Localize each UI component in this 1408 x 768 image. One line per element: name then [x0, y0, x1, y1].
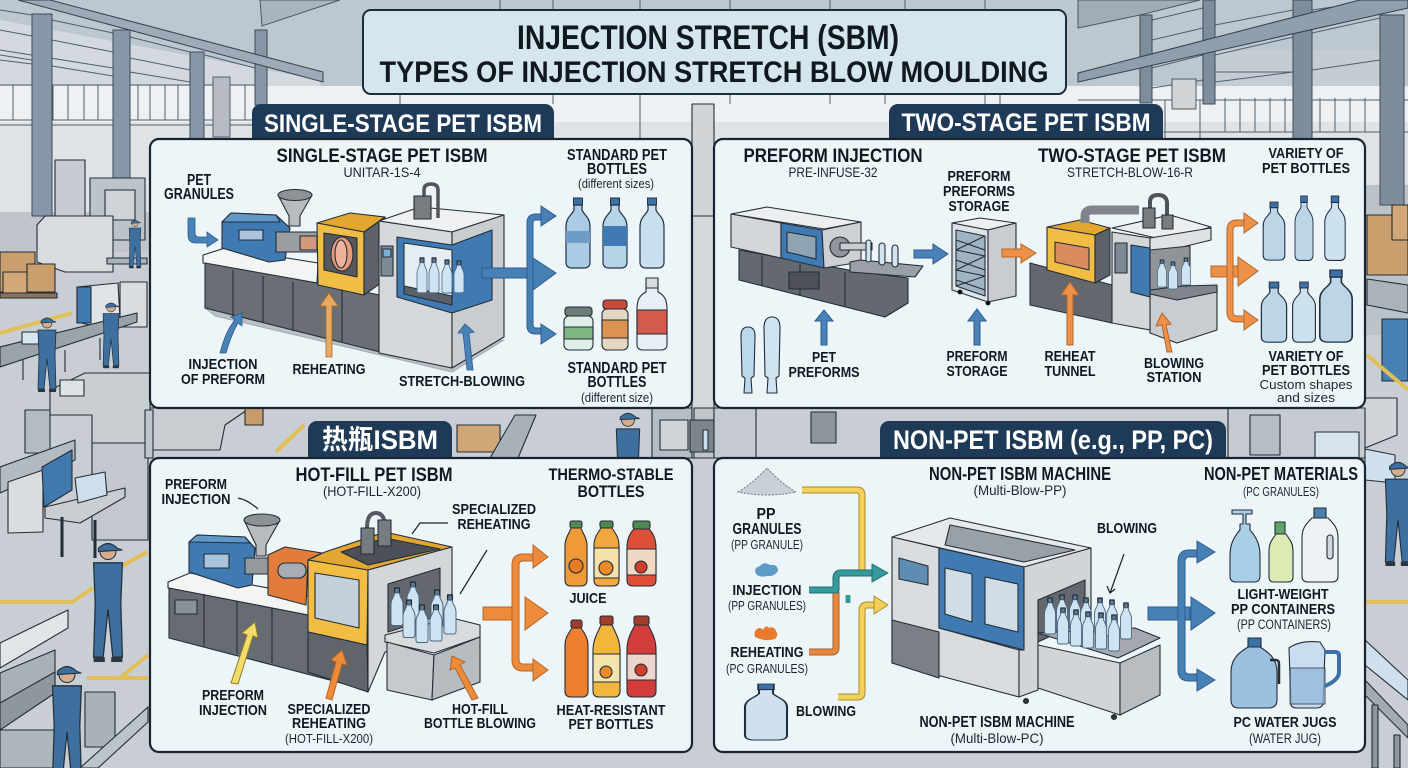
- labels: non-PET: PC WATER JUGS: [1234, 714, 1336, 731]
- callout arrows: hot-fill: [231, 498, 487, 700]
- labels: two-stage: TUNNEL: [1044, 363, 1096, 380]
- labels: single-stage: OF PREFORM: [181, 371, 265, 388]
- main title: [363, 10, 1066, 94]
- labels: non-PET: (PP GRANULE): [731, 537, 803, 552]
- labels: two-stage: STRETCH-BLOW-16-R: [1067, 164, 1193, 180]
- labels: single-stage: [164, 145, 667, 405]
- flow lines: materials: [802, 490, 888, 697]
- panel: two-stage PET ISBM: [714, 104, 1365, 408]
- labels: single-stage: PET: [187, 172, 211, 189]
- labels: two-stage: Custom shapes: [1260, 377, 1353, 392]
- tab heading: non-PET: NON-PET ISBM (e.g., PP, PC): [893, 425, 1213, 455]
- tab heading: hot-fill: [308, 421, 452, 469]
- labels: hot-fill: SPECIALIZED: [288, 701, 371, 718]
- labels: non-PET: PP CONTAINERS: [1231, 601, 1335, 618]
- labels: hot-fill: JUICE: [570, 590, 606, 607]
- labels: non-PET: NON-PET ISBM MACHINE: [929, 464, 1111, 484]
- bottles: water: [566, 198, 664, 268]
- main title: TYPES OF INJECTION STRETCH BLOW MOULDING: [380, 56, 1048, 89]
- labels: two-stage: PET BOTTLES: [1262, 160, 1350, 177]
- labels: two-stage: PREFORM: [948, 168, 1010, 185]
- machine: preform injection: [731, 207, 923, 317]
- labels: hot-fill: REHEATING: [292, 715, 366, 732]
- input arrows: single-stage: [188, 218, 474, 370]
- tab heading: hot-fill: 热瓶ISBM: [322, 425, 438, 455]
- labels: single-stage: BOTTLES: [588, 374, 646, 391]
- labels: non-PET: NON-PET MATERIALS: [1204, 464, 1358, 484]
- preform storage rack: [952, 218, 1016, 305]
- tab heading: two-stage: TWO-STAGE PET ISBM: [902, 109, 1150, 137]
- tab heading: single-stage: SINGLE-STAGE PET ISBM: [264, 110, 542, 138]
- labels: two-stage: VARIETY OF: [1268, 348, 1344, 365]
- labels: non-PET: [726, 464, 1358, 746]
- labels: non-PET: PP: [756, 506, 776, 523]
- labels: hot-fill: INJECTION: [162, 491, 230, 508]
- preforms icon: [741, 317, 780, 393]
- labels: two-stage: PREFORMS: [943, 183, 1015, 200]
- labels: non-PET: (PP CONTAINERS): [1237, 617, 1331, 632]
- icon: blue material: [755, 563, 778, 577]
- callout arrow: blowing: [1107, 554, 1124, 593]
- tab heading: single-stage: [252, 104, 554, 148]
- labels: single-stage: INJECTION: [188, 356, 258, 373]
- machine: non-PET: [892, 518, 1160, 720]
- labels: single-stage: STANDARD PET: [567, 147, 667, 164]
- tab heading: two-stage: [889, 104, 1163, 148]
- labels: non-PET: LIGHT-WEIGHT: [1238, 586, 1328, 603]
- labels: hot-fill: REHEATING: [458, 516, 530, 533]
- labels: non-PET: (Multi-Blow-PC): [950, 730, 1044, 746]
- labels: two-stage: TWO-STAGE PET ISBM: [1038, 145, 1226, 167]
- panel: single-stage PET ISBM: [150, 104, 692, 408]
- output arrows: hot-fill: [483, 545, 548, 681]
- output arrows: non-PET: [1148, 541, 1215, 691]
- labels: single-stage: (different sizes): [578, 177, 654, 191]
- machine: two-stage: [1030, 195, 1217, 343]
- labels: single-stage: BOTTLES: [587, 161, 647, 178]
- labels: hot-fill: BOTTLES: [578, 482, 644, 501]
- labels: two-stage: STATION: [1146, 369, 1202, 386]
- connecting arrows: two-stage: [815, 244, 1172, 352]
- labels: two-stage: PREFORMS: [788, 364, 860, 381]
- bottles: jars: [564, 278, 667, 350]
- labels: non-PET: (PC GRANULES): [726, 661, 808, 676]
- labels: non-PET: INJECTION: [732, 582, 802, 599]
- labels: two-stage: PET BOTTLES: [1262, 362, 1350, 379]
- labels: two-stage: REHEAT: [1044, 348, 1096, 365]
- labels: hot-fill: BOTTLE BLOWING: [424, 715, 536, 732]
- icon: heat flame: [754, 626, 777, 640]
- labels: non-PET: (PC GRANULES): [1243, 484, 1319, 499]
- labels: hot-fill: HOT-FILL: [452, 701, 508, 718]
- labels: non-PET: BLOWING: [796, 703, 856, 720]
- labels: hot-fill: (HOT-FILL-X200): [285, 731, 373, 746]
- labels: two-stage: PRE-INFUSE-32: [788, 164, 878, 180]
- labels: hot-fill: PET BOTTLES: [568, 716, 654, 733]
- reheating arrow: [320, 293, 338, 357]
- labels: two-stage: [744, 145, 1353, 405]
- labels: non-PET: (WATER JUG): [1249, 731, 1321, 746]
- bottles: juice: [565, 521, 656, 697]
- panel: hot-fill PET ISBM: [150, 421, 692, 752]
- main title: INJECTION STRETCH (SBM): [517, 19, 899, 57]
- labels: hot-fill: HOT-FILL PET ISBM: [296, 465, 452, 486]
- labels: single-stage: GRANULES: [164, 186, 234, 203]
- labels: non-PET: NON-PET ISBM MACHINE: [920, 714, 1074, 731]
- labels: single-stage: REHEATING: [292, 361, 366, 378]
- output arrows: two-stage: [1211, 213, 1258, 330]
- machine: single-stage: [203, 184, 504, 372]
- labels: non-PET: (Multi-Blow-PP): [974, 482, 1066, 498]
- labels: hot-fill: PREFORM: [202, 687, 264, 704]
- labels: two-stage: and sizes: [1277, 390, 1336, 405]
- products: water jugs: [1231, 638, 1339, 708]
- labels: single-stage: STANDARD PET: [568, 360, 667, 377]
- labels: two-stage: PREFORM INJECTION: [744, 145, 922, 167]
- labels: non-PET: (PP GRANULES): [728, 598, 806, 613]
- labels: hot-fill: (HOT-FILL-X200): [323, 483, 421, 499]
- labels: non-PET: BLOWING: [1097, 520, 1157, 537]
- output arrows: single-stage: [482, 206, 556, 344]
- icon: PP granule pile: [738, 468, 796, 495]
- products: containers: [1230, 508, 1338, 582]
- labels: two-stage: PREFORM: [946, 348, 1008, 365]
- labels: two-stage: PET: [812, 349, 836, 366]
- labels: two-stage: STORAGE: [946, 363, 1008, 380]
- labels: single-stage: SINGLE-STAGE PET ISBM: [276, 145, 488, 167]
- machine: hot-fill: [168, 513, 480, 700]
- labels: hot-fill: THERMO-STABLE: [548, 465, 674, 484]
- labels: single-stage: UNITAR-1S-4: [344, 164, 421, 180]
- labels: non-PET: GRANULES: [732, 521, 802, 538]
- labels: hot-fill: INJECTION: [199, 702, 267, 719]
- labels: hot-fill: HEAT-RESISTANT: [556, 702, 666, 719]
- labels: single-stage: (different size): [581, 391, 653, 405]
- tab heading: non-PET: [880, 421, 1226, 469]
- labels: hot-fill: PREFORM: [165, 476, 227, 493]
- labels: two-stage: STORAGE: [948, 198, 1010, 215]
- labels: single-stage: STRETCH-BLOWING: [399, 373, 525, 390]
- panel: non-PET ISBM: [714, 421, 1365, 752]
- labels: two-stage: BLOWING: [1144, 355, 1204, 372]
- labels: hot-fill: [162, 465, 674, 746]
- labels: non-PET: REHEATING: [730, 644, 804, 661]
- labels: two-stage: VARIETY OF: [1268, 145, 1344, 162]
- icon: jug: [745, 684, 787, 740]
- labels: hot-fill: SPECIALIZED: [452, 501, 536, 518]
- bottles: variety: [1261, 196, 1352, 342]
